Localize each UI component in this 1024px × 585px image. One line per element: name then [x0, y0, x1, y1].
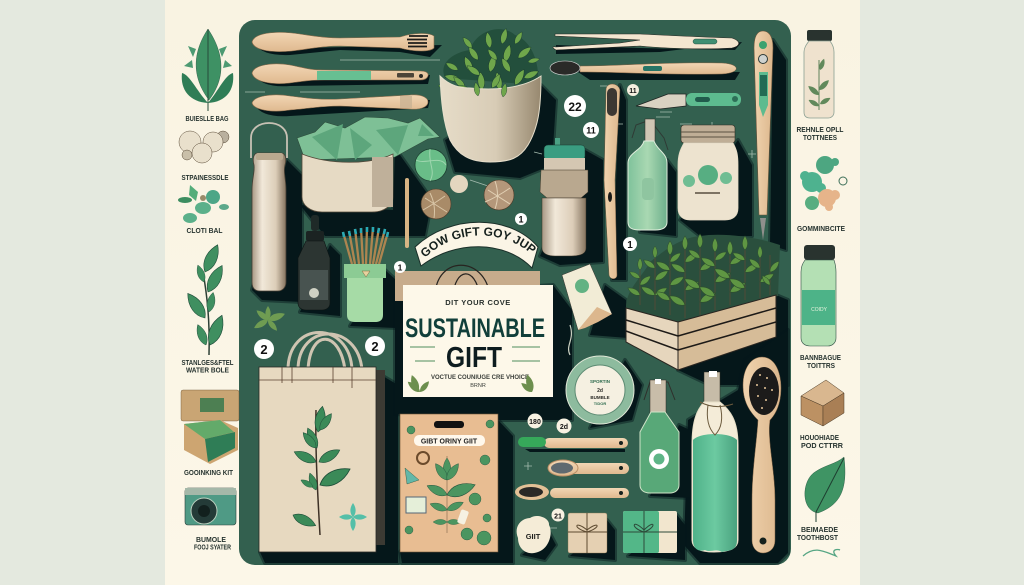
sidebar right: glass jar [804, 30, 834, 118]
label: GOMMINBCITE [797, 224, 845, 233]
round tin: BUMBLE [590, 395, 610, 400]
label: BEIMAEDE [801, 525, 838, 534]
gift cloud [517, 516, 551, 553]
small toothbrushes [515, 437, 629, 500]
round tin: SPORTIN [590, 379, 610, 384]
pruning clip [636, 93, 741, 109]
tumbler [540, 138, 588, 256]
sticker card [400, 414, 498, 552]
wooden stick [405, 178, 409, 248]
sidebar left: leaf branch [183, 242, 228, 355]
sidebar left: camera [185, 488, 236, 525]
label: GOOINKING KIT [184, 468, 233, 477]
mason jar [678, 125, 738, 220]
sidebar right: clover stickers [800, 156, 847, 211]
canvas tote bag [259, 332, 385, 552]
sticker card: GIBT ORINY GIIT [421, 438, 478, 446]
small green bottle [640, 379, 679, 493]
gift bag card: GIFT [446, 342, 502, 374]
dropper bottle [298, 215, 330, 310]
label: BUIESLLE BAG [186, 114, 229, 123]
cast shadows [252, 40, 788, 563]
bag handles [288, 332, 362, 370]
sidebar right: leaf [805, 457, 845, 522]
tube [562, 264, 612, 330]
numbered badges: 2: 2 [371, 339, 379, 354]
plant crate [626, 234, 781, 370]
label: TOOTHBOST [797, 533, 838, 542]
herb sprig [253, 306, 286, 332]
spoon 2 [252, 64, 430, 86]
label: CLOTI BAL [186, 226, 223, 235]
panel: dark green board [239, 20, 791, 565]
badges: top right: 1 [627, 240, 633, 251]
gift bag card: BRNR [470, 383, 486, 389]
cloth pouch with green fabric [297, 117, 440, 212]
badges: top right [515, 84, 639, 251]
label: WATER BOLE [186, 366, 229, 375]
sidebar left: cotton balls [179, 131, 229, 163]
badges: top right: 11 [629, 88, 637, 95]
spoon 1 [252, 32, 442, 57]
gift bag card: SUSTAINABLE [405, 313, 545, 343]
sidebar left: leaf [182, 29, 233, 111]
wooden toothbrush vertical [604, 84, 620, 279]
squiggle [803, 550, 840, 556]
label: POD CTTRR [801, 441, 843, 450]
label: BANNBAGUE [800, 353, 841, 362]
sparkles and faint marks [245, 60, 756, 528]
long wooden thermometer [754, 31, 773, 240]
gift cloud: GIIT [526, 532, 541, 541]
round tin: 2d [597, 388, 603, 394]
badges: lower centre: 2d [560, 424, 568, 431]
cup with bamboo sticks [343, 227, 388, 322]
label: TOTTNEES [803, 133, 837, 142]
spoon 3 [252, 95, 430, 116]
plant foliage [443, 29, 538, 85]
numbered badges: 2 [254, 336, 385, 359]
badges: top right: 1 [518, 214, 524, 224]
badge: 1: 1 [398, 262, 403, 272]
label: HOUOHIADE [800, 433, 839, 442]
round tin [566, 356, 634, 424]
label: BUMOLE [196, 535, 226, 544]
label: STPAINESSDLE [182, 173, 228, 182]
gift box: kraft [568, 513, 607, 553]
sidebar right: green bottle: COIDY [811, 307, 828, 313]
badges: lower centre: 180 [529, 419, 541, 426]
sidebar right: kraft parcel [801, 380, 844, 426]
hairbrush [743, 357, 781, 553]
numbered badges: 2: 2 [260, 342, 268, 357]
twine balls [421, 175, 514, 219]
round tin: TIDOR [594, 401, 606, 406]
label: TOITTRS [807, 361, 835, 370]
seedlings [626, 235, 780, 322]
gift bag card: VOCTUE COUNIUGE CRE VHOICE [431, 375, 529, 381]
cream poster sheet [165, 0, 860, 585]
label: STANLGES&FTEL [182, 358, 234, 367]
green ball [415, 149, 447, 181]
plant in pot [438, 28, 541, 162]
label: REHNLE OPLL [796, 125, 844, 134]
steel water bottle [251, 123, 287, 291]
green glass bottle [628, 119, 668, 230]
badges: top right: 11 [586, 126, 596, 136]
tongs [553, 34, 742, 54]
badges: top right: 22 [568, 100, 582, 114]
sidebar left: green stones [178, 185, 229, 223]
teal flower [339, 503, 367, 531]
label: FOOJ SYATER [194, 542, 231, 552]
badges: lower centre [528, 414, 572, 522]
banner: GOW GIFT GOY JUP [421, 227, 536, 256]
leaf branch motif [291, 406, 353, 535]
gift box: green [623, 511, 677, 553]
sidebar right: green bottle [801, 245, 836, 346]
badge: 1 [394, 261, 406, 273]
toothbrush horizontal [550, 61, 740, 80]
badges: lower centre: 21 [554, 514, 562, 520]
gift bag card [395, 265, 553, 397]
sidebar left: gift kit box [181, 390, 239, 464]
tall bottle [692, 371, 738, 552]
squiggle ribbon [569, 325, 571, 355]
gift bag card: DIT YOUR COVE [445, 298, 511, 307]
